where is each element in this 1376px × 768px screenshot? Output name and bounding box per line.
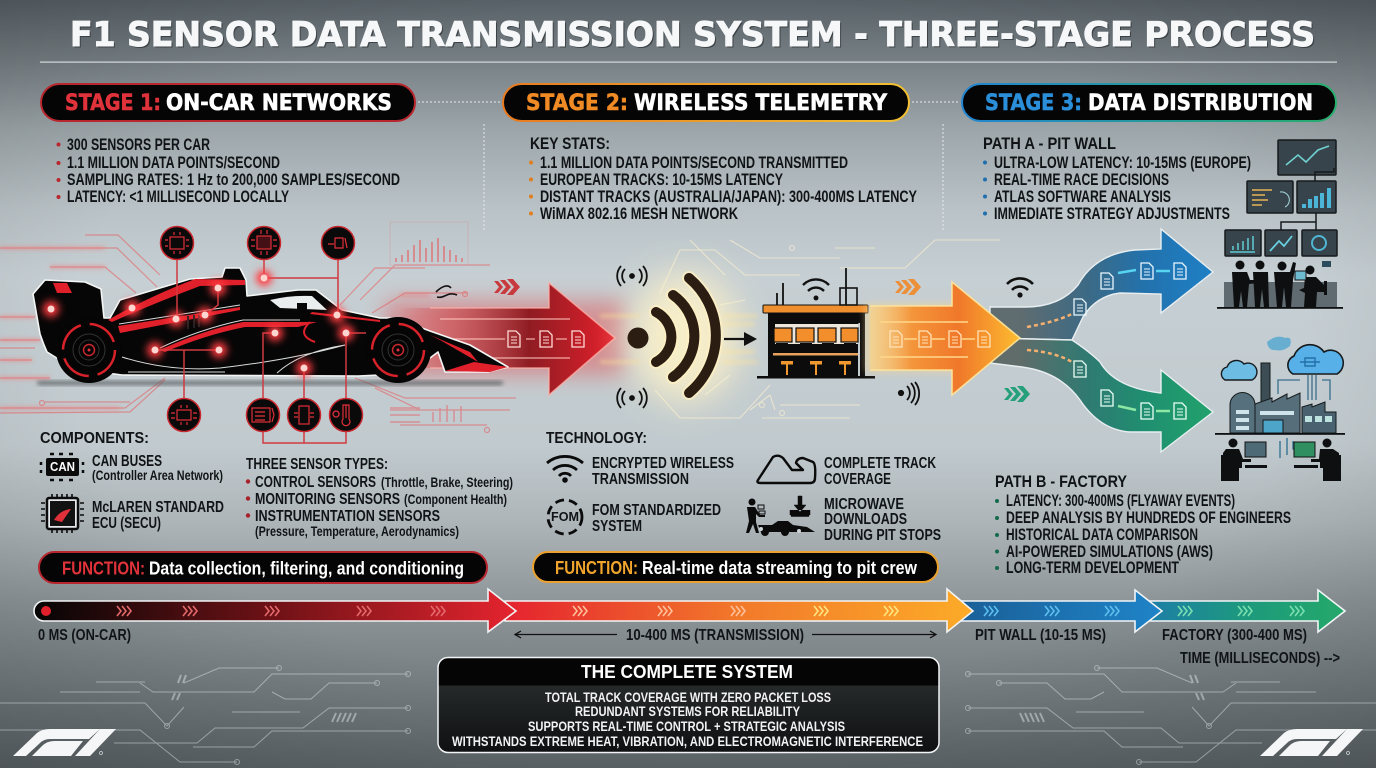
- icon: wifi: [547, 456, 583, 483]
- F1 car with sensors: [33, 259, 508, 443]
- panel: the complete system: THE COMPLETE SYSTEM: [581, 661, 793, 682]
- timeline markers: [41, 606, 1304, 616]
- stage 2 stats list: DISTANT TRACKS (AUSTRALIA/JAPAN): 300-400MS LATENCY: [540, 188, 917, 206]
- timeline labels: PIT WALL (10-15 MS): [975, 627, 1106, 644]
- technology block: DURING PIT STOPS: [824, 527, 941, 544]
- technology block: ENCRYPTED WIRELESS: [592, 455, 734, 472]
- stage 2 stats list: EUROPEAN TRACKS: 10-15MS LATENCY: [540, 171, 783, 189]
- sensor types block: CONTROL SENSORS: [255, 474, 376, 491]
- stage 1 stats list: 1.1 MILLION DATA POINTS/SECOND: [67, 154, 280, 172]
- function pill stage 1: FUNCTION:: [62, 558, 145, 578]
- stage 3 heading: DATA DISTRIBUTION: [1088, 90, 1313, 116]
- icon: central wireless signal: [628, 278, 716, 393]
- path A list: IMMEDIATE STRATEGY ADJUSTMENTS: [994, 205, 1230, 223]
- icon: mechanic and download: [746, 496, 815, 536]
- timeline segment: transmission: [505, 589, 973, 632]
- stage 3 heading: STAGE 3:: [985, 90, 1082, 116]
- stage 2 heading: STAGE 2:: [526, 90, 628, 116]
- path A list: REAL-TIME RACE DECISIONS: [994, 171, 1169, 189]
- timeline labels: [38, 627, 1340, 667]
- panel: the complete system: REDUNDANT SYSTEMS FOR RELIABILITY: [575, 704, 800, 719]
- function pill stage 1: [39, 552, 487, 583]
- blue branch arrow: [990, 229, 1213, 340]
- timeline segment: on-car: [34, 589, 516, 632]
- stage 3 heading: [962, 84, 1336, 121]
- icon: wifi stage 3: [1007, 278, 1033, 298]
- sensor types block: (Component Health): [404, 491, 507, 507]
- timeline segment: factory: [1150, 590, 1345, 632]
- path B list: LATENCY: 300-400MS (FLYAWAY EVENTS): [1006, 492, 1235, 510]
- glow behind wireless symbol: [630, 273, 740, 403]
- icon: pit garage: [757, 268, 875, 378]
- technology block: DOWNLOADS: [824, 511, 907, 528]
- sensor wiring: [155, 259, 366, 443]
- stage 2 stats list: [529, 135, 917, 223]
- path B list: PATH B - FACTORY: [995, 473, 1127, 491]
- bottom circuit traces left: [0, 666, 410, 764]
- path B list: AI-POWERED SIMULATIONS (AWS): [1006, 543, 1213, 561]
- stage 1 stats list: [56, 136, 400, 206]
- function pill stage 2: [533, 552, 938, 582]
- stage 2 stats list: WiMAX 802.16 MESH NETWORK: [540, 205, 738, 223]
- panel: the complete system: SUPPORTS REAL-TIME CONTROL + STRATEGIC ANALYSIS: [528, 719, 845, 734]
- stage 1 stats list: 300 SENSORS PER CAR: [67, 136, 210, 154]
- icon: FOM: [548, 500, 582, 534]
- icon: pit wall team and monitors: [1217, 140, 1343, 309]
- panel: the complete system: TOTAL TRACK COVERAGE WITH ZERO PACKET LOSS: [545, 690, 831, 705]
- technology block: COMPLETE TRACK: [824, 455, 936, 472]
- stage 1 stats list: LATENCY: <1 MILLISECOND LOCALLY: [67, 188, 289, 206]
- stage 1 heading: STAGE 1:: [65, 90, 161, 116]
- timeline segment: pit wall: [960, 590, 1162, 632]
- technology block: SYSTEM: [592, 518, 642, 535]
- icon: track: [757, 456, 815, 483]
- car ground shadow: [37, 381, 503, 385]
- path A list: [983, 135, 1251, 223]
- path A list: PATH A - PIT WALL: [983, 135, 1116, 153]
- technology block: COVERAGE: [824, 471, 891, 488]
- sensor glow dots: [43, 270, 354, 376]
- sensor types block: (Throttle, Brake, Steering): [381, 474, 513, 490]
- timeline labels: FACTORY (300-400 MS): [1162, 627, 1307, 644]
- components block: (Controller Area Network): [92, 467, 223, 483]
- sensor types block: [246, 456, 513, 539]
- arrow: wireless to pit: [724, 332, 757, 346]
- stage 1 stats list: SAMPLING RATES: 1 Hz to 200,000 SAMPLES/SECOND: [67, 171, 400, 189]
- small flow chevrons: [436, 279, 1030, 402]
- title: F1 SENSOR DATA TRANSMISSION SYSTEM - THREE-STAGE PROCESS: [70, 15, 1315, 55]
- technology block: TRANSMISSION: [592, 471, 689, 488]
- technology block: [546, 430, 941, 544]
- icon: factory with cloud: [1215, 337, 1345, 481]
- components block: COMPONENTS:: [40, 430, 149, 447]
- icon: FOM: FOM: [551, 509, 579, 524]
- stage 2 heading: [503, 84, 909, 121]
- icon: small wireless right: [899, 382, 919, 405]
- technology block: TECHNOLOGY:: [546, 430, 647, 447]
- path B list: LONG-TERM DEVELOPMENT: [1006, 559, 1179, 577]
- sensor icon circles: [160, 226, 362, 432]
- path B list: [995, 473, 1291, 577]
- F1 logo right: [1260, 729, 1363, 756]
- stage 2 stats list: KEY STATS:: [530, 135, 610, 153]
- stage 2 heading: WIRELESS TELEMETRY: [634, 90, 888, 116]
- icon: CAN chip: [41, 454, 83, 480]
- title: F1 SENSOR DATA TRANSMISSION SYSTEM - THREE-STAGE PROCESS: [72, 16, 1316, 56]
- function pill stage 1: Data collection, filtering, and conditioning: [149, 558, 464, 578]
- timeline labels: TIME (MILLISECONDS) -->: [1180, 650, 1340, 667]
- sensor types block: MONITORING SENSORS: [255, 491, 400, 508]
- icon: CAN chip: CAN: [50, 460, 75, 474]
- dotted separators: [418, 102, 960, 232]
- rear wheel: [56, 317, 122, 383]
- car body: [33, 268, 508, 376]
- stage 2 stats list: 1.1 MILLION DATA POINTS/SECOND TRANSMITTED: [540, 154, 848, 172]
- components block: CAN BUSES: [92, 453, 162, 470]
- icon: ECU chip: [41, 494, 84, 533]
- sensor types block: THREE SENSOR TYPES:: [246, 456, 388, 473]
- F1 logo left: [13, 729, 116, 756]
- green branch arrow: [990, 338, 1213, 452]
- yellow streaks beside wireless symbol: [600, 316, 758, 362]
- sensor types block: (Pressure, Temperature, Aerodynamics): [255, 523, 459, 539]
- components block: McLAREN STANDARD: [92, 499, 224, 516]
- front wheel: [365, 317, 431, 383]
- technology block: MICROWAVE: [824, 496, 904, 513]
- path B list: HISTORICAL DATA COMPARISON: [1006, 526, 1198, 544]
- red body lines: [53, 279, 508, 372]
- background circuit traces: red near car: [0, 222, 516, 432]
- components block: [40, 430, 224, 533]
- pale circuit traces around stage 2: [655, 240, 1000, 418]
- red data arrow: [385, 283, 625, 395]
- components block: ECU (SECU): [92, 515, 161, 532]
- icon: small wireless up: [617, 266, 647, 286]
- function pill stage 2: Real-time data streaming to pit crew: [642, 558, 918, 578]
- technology block: FOM STANDARDIZED: [592, 502, 721, 519]
- bottom circuit traces right: [966, 666, 1376, 764]
- left glow streaks: [0, 248, 430, 408]
- sensor types block: INSTRUMENTATION SENSORS: [255, 508, 440, 525]
- panel: the complete system: WITHSTANDS EXTREME HEAT, VIBRATION, AND ELECTROMAGNETIC INTERFERENCE: [452, 734, 923, 749]
- stage 1 heading: ON-CAR NETWORKS: [166, 90, 392, 116]
- timeline labels: 0 MS (ON-CAR): [38, 627, 131, 644]
- path A list: ULTRA-LOW LATENCY: 10-15MS (EUROPE): [994, 154, 1251, 172]
- orange data arrow: [866, 282, 1020, 395]
- panel: the complete system: [438, 658, 939, 752]
- cockpit window: [270, 296, 327, 310]
- timeline: [34, 589, 1345, 632]
- function pill stage 2: FUNCTION:: [555, 558, 638, 578]
- stage 1 heading: [41, 84, 415, 121]
- path A list: ATLAS SOFTWARE ANALYSIS: [994, 188, 1171, 206]
- icon: small wireless down: [617, 388, 647, 408]
- timeline labels: 10-400 MS (TRANSMISSION): [626, 627, 804, 644]
